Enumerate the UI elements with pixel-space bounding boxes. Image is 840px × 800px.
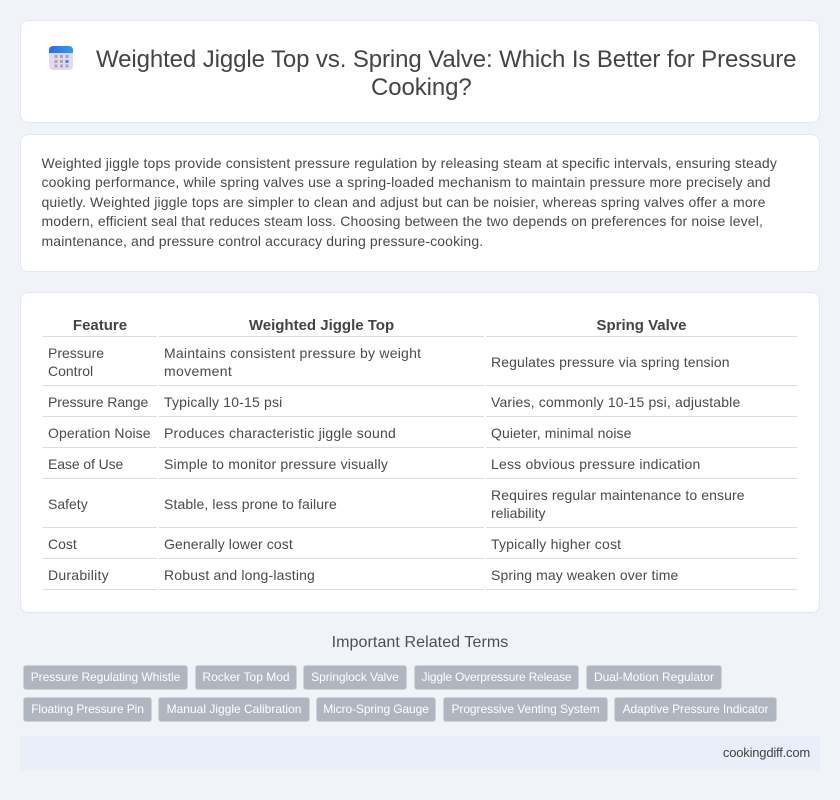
row: Operation Noise (48, 425, 631, 441)
row: Pressure Range: Pressure Range (48, 394, 148, 410)
tag: Pressure Regulating Whistle (31, 670, 180, 684)
description text: cooking performance, while spring valves use a spring-loaded mechanism to maintain pressure more precisely and (42, 174, 771, 190)
description text: quietly. Weighted jiggle tops are simpler to clean and adjust but can be noisier, whereas spring valves offer a more (42, 194, 766, 210)
description text (42, 155, 777, 249)
tag: Floating Pressure Pin (31, 702, 144, 716)
tag (195, 665, 297, 690)
tag: Jiggle Overpressure Release (422, 670, 571, 684)
row: Pressure Control: Pressure (48, 345, 104, 361)
row: Pressure Control (48, 345, 730, 379)
icon: calendar (49, 46, 73, 70)
row: Cost: Generally lower cost (164, 536, 293, 552)
panel: comparison table (20, 292, 820, 613)
row: Cost: Typically higher cost (491, 536, 621, 552)
row: Operation Noise: Quieter, minimal noise (491, 425, 631, 441)
tag (614, 697, 777, 722)
tag: Adaptive Pressure Indicator (623, 702, 768, 716)
title: Weighted Jiggle Top vs. Spring Valve: Which Is Better for Pressure (96, 46, 796, 73)
row: Pressure Range: Varies, commonly 10-15 psi, adjustable (491, 394, 740, 410)
row: Safety: Stable, less prone to failure (164, 496, 337, 512)
row: Pressure Control: Regulates pressure via spring tension (491, 354, 730, 370)
row: Safety: Safety (48, 496, 88, 512)
tag (316, 697, 436, 722)
panel: description (20, 134, 820, 272)
row: Cost (48, 536, 621, 552)
row: Safety (48, 487, 745, 521)
table header row (73, 317, 687, 334)
footer source: cookingdiff.com (723, 745, 810, 760)
tag (158, 697, 310, 722)
tag (443, 697, 608, 722)
row: Pressure Control: movement (164, 363, 232, 379)
tag: Springlock Valve (311, 670, 399, 684)
row: Ease of Use: Ease of Use (48, 456, 123, 472)
tag: Dual-Motion Regulator (594, 670, 714, 684)
title (96, 46, 796, 101)
row: Pressure Control: Maintains consistent pressure by weight (164, 345, 421, 361)
row: Ease of Use (48, 456, 701, 472)
tag: Progressive Venting System (452, 702, 600, 716)
table header row: Feature (73, 317, 127, 334)
footer bar (20, 736, 820, 770)
row: Cost: Cost (48, 536, 77, 552)
row: Pressure Range: Typically 10-15 psi (164, 394, 282, 410)
row: Ease of Use: Less obvious pressure indication (491, 456, 701, 472)
row: Pressure Range (48, 394, 740, 410)
table header row: Spring Valve (596, 317, 687, 334)
row: Safety: Requires regular maintenance to ensure (491, 487, 745, 503)
row: Operation Noise: Operation Noise (48, 425, 151, 441)
row: Durability: Spring may weaken over time (491, 567, 678, 583)
row: Pressure Control: Control (48, 363, 93, 379)
tag: Micro-Spring Gauge (323, 702, 429, 716)
panel: header (20, 20, 820, 123)
related term tags (23, 665, 777, 722)
row: Durability: Robust and long-lasting (164, 567, 315, 583)
row: Durability (48, 567, 678, 583)
description text: maintenance, and pressure control accuracy during pressure-cooking. (42, 233, 483, 249)
tag (23, 665, 188, 690)
description text: modern, efficient seal that reduces steam loss. Choosing between the two depends on preferences for noise level, (42, 213, 763, 229)
description text: Weighted jiggle tops provide consistent pressure regulation by releasing steam at specific intervals, ensuring steady (42, 155, 777, 171)
row: Operation Noise: Produces characteristic jiggle sound (164, 425, 396, 441)
tag (303, 665, 407, 690)
row: Safety: reliability (491, 505, 545, 521)
table header row: Weighted Jiggle Top (249, 317, 394, 334)
heading: related terms: Important Related Terms (332, 634, 508, 651)
tag (586, 665, 722, 690)
tag: Manual Jiggle Calibration (167, 702, 301, 716)
tag: Rocker Top Mod (202, 670, 290, 684)
row: Ease of Use: Simple to monitor pressure visually (164, 456, 388, 472)
title: Cooking? (371, 74, 472, 101)
row: Durability: Durability (48, 567, 109, 583)
tag (414, 665, 579, 690)
tag (23, 697, 152, 722)
